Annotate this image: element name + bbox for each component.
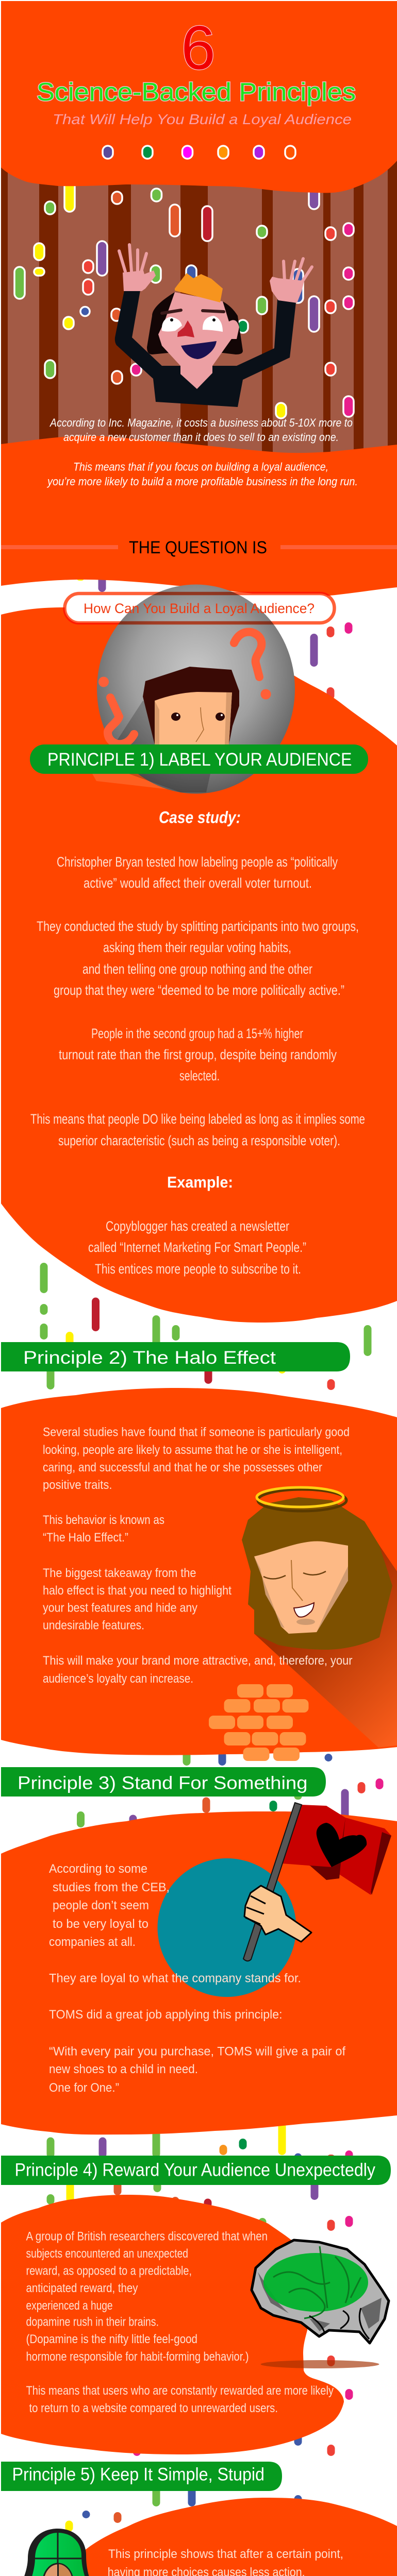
title main line: Science-Backed Principles [37, 78, 356, 106]
case study text: selected. [179, 1068, 220, 1083]
principle 2 text: positive traits. [43, 1478, 112, 1492]
principle 4 text: A group of British researchers discovered that when [26, 2230, 268, 2243]
flag folds [310, 1818, 391, 1895]
nose [177, 320, 194, 337]
panel: principle 4 blob [1, 2195, 344, 2454]
principle 2 banner [1, 1342, 350, 1371]
hand knuckles [245, 1896, 266, 1924]
egg [97, 584, 295, 793]
confetti pills on white [27, 502, 384, 2576]
seed shade [58, 2564, 73, 2576]
panel: principle 2 blob [1, 1388, 397, 1755]
right eye highlight [221, 714, 223, 716]
principle 4 text: subjects encountered an unexpected [26, 2247, 188, 2261]
heading: the question is: THE QUESTION IS [129, 538, 267, 557]
principle 2 text: undesirable features. [43, 1619, 144, 1632]
brain dark folds [258, 2272, 382, 2331]
seed [43, 2564, 73, 2576]
background stripes [1, 155, 397, 464]
right hand [270, 259, 312, 303]
panel: principle 1 blob [1, 607, 397, 1323]
heart [317, 1823, 367, 1867]
principle 3 text: new shoes to a child in need. [49, 2062, 198, 2076]
illustration: brain [252, 2240, 389, 2343]
icon: question marks [98, 632, 271, 744]
left eye highlight [176, 714, 178, 716]
left hand [119, 245, 156, 291]
principle 3 text: They are loyal to what the company stands for. [49, 1971, 301, 1986]
intro text: acquire a new customer than it does to sell to an existing one. [63, 431, 339, 444]
seed divider [57, 2564, 59, 2576]
hand [244, 1886, 311, 1942]
principle 2 banner: Principle 2) The Halo Effect [23, 1348, 276, 1368]
case study text: active” would affect their overall voter turnout. [84, 875, 312, 891]
heading: the question is [1, 538, 397, 557]
example text: Copyblogger has created a newsletter [106, 1218, 289, 1234]
principle 4 text: to return to a website compared to unrewarded users. [29, 2401, 278, 2415]
eyes closed [263, 1571, 326, 1579]
principle 4 text: This means that users who are constantly rewarded are more likely [26, 2384, 334, 2398]
pole [243, 1803, 302, 1961]
principle 4 text: reward, as opposed to a predictable, [26, 2264, 192, 2278]
example text [88, 1173, 306, 1277]
principle 2 text: caring, and successful and that he or she possesses other [43, 1461, 322, 1475]
body and arms [115, 291, 296, 407]
case study text: People in the second group had a 15+% higher [91, 1026, 303, 1041]
principle 3 text: According to some [49, 1862, 147, 1876]
principle 5 banner [1, 2462, 282, 2491]
eyebrows [162, 310, 224, 313]
halo [257, 1487, 343, 1507]
illustration: teal circle [158, 1858, 296, 1997]
chin shadow [296, 1619, 315, 1625]
mouth [294, 1603, 314, 1617]
principle 2 text: looking, people are likely to assume that he or she is intelligent, [43, 1443, 342, 1457]
principle 3 banner: Principle 3) Stand For Something [18, 1773, 307, 1793]
principle 4 banner: Principle 4) Reward Your Audience Unexpectedly [14, 2160, 375, 2180]
example heading: Example: [167, 1173, 233, 1191]
question pill background [65, 594, 334, 623]
illustration: puzzled face in egg [92, 584, 295, 793]
brain outline [252, 2240, 389, 2343]
principle 4 text: (Dopamine is the nifty little feel-good [26, 2332, 197, 2346]
halo shadow [258, 1489, 346, 1511]
example text: This entices more people to subscribe to it. [95, 1261, 301, 1277]
principle 4 banner [1, 2156, 391, 2185]
flag cloth [282, 1805, 391, 1895]
principle 4 text: experienced a huge [26, 2299, 112, 2313]
confetti pills on stripes [14, 175, 354, 418]
hair [147, 292, 243, 354]
principle 3 banner [1, 1767, 326, 1797]
mouth [181, 341, 217, 359]
principle 4 text [26, 2230, 334, 2415]
intro text: you’re more likely to build a more profitable business in the long run. [46, 475, 358, 488]
principle 3 text [49, 1862, 345, 2095]
principle 4 text: hormone responsible for habit-forming behavior.) [26, 2350, 249, 2364]
panel: intro band [1, 436, 397, 597]
principle 3 text: “With every pair you purchase, TOMS will give a pair of [49, 2044, 345, 2059]
skin shade [155, 692, 232, 744]
bricks: principle 2 [209, 1684, 308, 1761]
six coloured dots [103, 146, 295, 159]
hair [143, 667, 239, 744]
green glow [263, 2253, 368, 2312]
case study text: and then telling one group nothing and the other [82, 961, 312, 977]
case study text: turnout rate than the first group, despite being randomly [59, 1047, 337, 1062]
intro text: According to Inc. Magazine, it costs a business about 5-10X more to [49, 416, 353, 429]
principle 3 text: companies at all. [49, 1935, 136, 1949]
intro text: This means that if you focus on building a loyal audience, [73, 461, 328, 473]
long shadow [254, 1546, 397, 1748]
question pill text: How Can You Build a Loyal Audience? [84, 601, 315, 616]
skin shade [254, 1556, 348, 1632]
neck [180, 361, 212, 389]
nose [196, 707, 204, 742]
principle 5 text: This principle shows that after a certain point, [108, 2547, 343, 2561]
panel: header blob [1, 1, 397, 193]
case study text: asking them their regular voting habits, [103, 940, 291, 955]
principle 2 text: halo effect is that you need to highlight [43, 1584, 231, 1598]
principle 5 banner: Principle 5) Keep It Simple, Stupid [12, 2465, 264, 2484]
brain wrinkles [273, 2246, 361, 2318]
principle 4 text: anticipated reward, they [26, 2281, 138, 2295]
lower wrinkles [309, 2308, 369, 2339]
title numeral: 6 [181, 13, 216, 82]
case study text [30, 808, 365, 1148]
principle 5 text [108, 2547, 397, 2576]
intro text [46, 416, 358, 488]
principle 3 text: people don’t seem [53, 1899, 149, 1912]
shield lines [27, 2533, 91, 2576]
illustration: cheering person [115, 245, 312, 407]
long shadow [92, 744, 206, 790]
example text: called “Internet Marketing For Smart People.” [88, 1240, 306, 1255]
question pill border [65, 594, 334, 623]
nose [291, 1560, 303, 1601]
face shadow [116, 701, 210, 792]
skin [254, 1541, 348, 1634]
principle 2 text: audience’s loyalty can increase. [43, 1672, 193, 1686]
principle 2 text: The biggest takeaway from the [43, 1566, 196, 1580]
right eye [216, 713, 225, 721]
hair [242, 1497, 392, 1650]
crown [175, 273, 223, 302]
left pupil [170, 318, 173, 321]
panel: principle 3 blob [1, 1811, 397, 2134]
illustration: face with halo [242, 1487, 397, 1748]
left eye [171, 713, 180, 721]
shield outline [12, 2529, 99, 2576]
principle 2 text: “The Halo Effect.” [43, 1531, 128, 1545]
shield green [23, 2533, 94, 2576]
principle 3 text: to be very loyal to [53, 1917, 148, 1931]
principle 1 banner: PRINCIPLE 1) LABEL YOUR AUDIENCE [47, 750, 352, 770]
title [37, 13, 356, 127]
principle 2 text: This will make your brand more attractive, and, therefore, your [43, 1654, 353, 1668]
principle 2 text: Several studies have found that if someone is particularly good [43, 1425, 350, 1439]
illustration: avocado shield [12, 2529, 99, 2576]
eyes [162, 316, 223, 332]
illustration: flag with heart and hand [243, 1803, 391, 1961]
principle 3 text: One for One.” [49, 2081, 119, 2095]
skin [155, 692, 232, 744]
right pupil [212, 318, 216, 321]
face [158, 292, 239, 366]
case study heading: Case study: [159, 808, 241, 826]
principle 1 banner [30, 744, 368, 774]
brain shadow [261, 2360, 379, 2368]
principle 3 text: studies from the CEB, [53, 1880, 170, 1894]
principle 2 text: your best features and hide any [43, 1601, 197, 1615]
principle 3 text: TOMS did a great job applying this principle: [49, 2008, 283, 2022]
principle 4 text: dopamine rush in their brains. [26, 2315, 159, 2329]
subtitle: That Will Help You Build a Loyal Audience [53, 111, 352, 127]
panel: principle 5 blob [25, 2498, 397, 2576]
principle 2 text [43, 1425, 353, 1686]
principle 2 text: This behavior is known as [43, 1513, 164, 1527]
